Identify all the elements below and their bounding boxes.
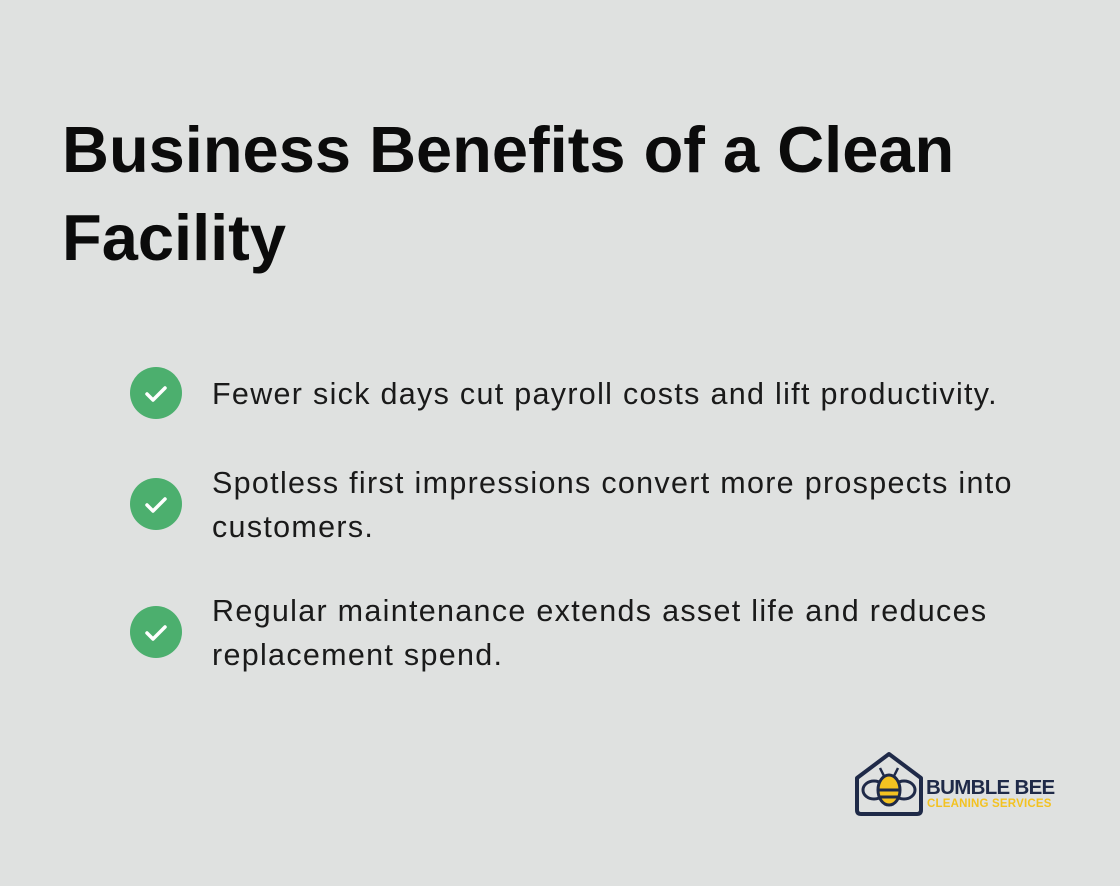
logo bbox=[855, 752, 1055, 816]
benefit 3: Regular maintenance extends asset life and reduces replacement spend. bbox=[212, 594, 987, 672]
benefit 1: Fewer sick days cut payroll costs and lift productivity. bbox=[212, 377, 998, 411]
logo: CLEANING SERVICES bbox=[927, 798, 1052, 810]
icon: check 2 bbox=[130, 478, 182, 530]
benefit 1 bbox=[130, 367, 998, 419]
icon: check 1 bbox=[130, 367, 182, 419]
title bbox=[62, 113, 954, 274]
logo: BUMBLE BEE bbox=[926, 776, 1055, 799]
title: Facility bbox=[62, 201, 286, 274]
benefit 2: Spotless first impressions convert more prospects into customers. bbox=[212, 466, 1013, 544]
icon: check 3 bbox=[130, 606, 182, 658]
icon: bee house bbox=[855, 752, 923, 816]
title: Business Benefits of a Clean bbox=[62, 113, 954, 186]
